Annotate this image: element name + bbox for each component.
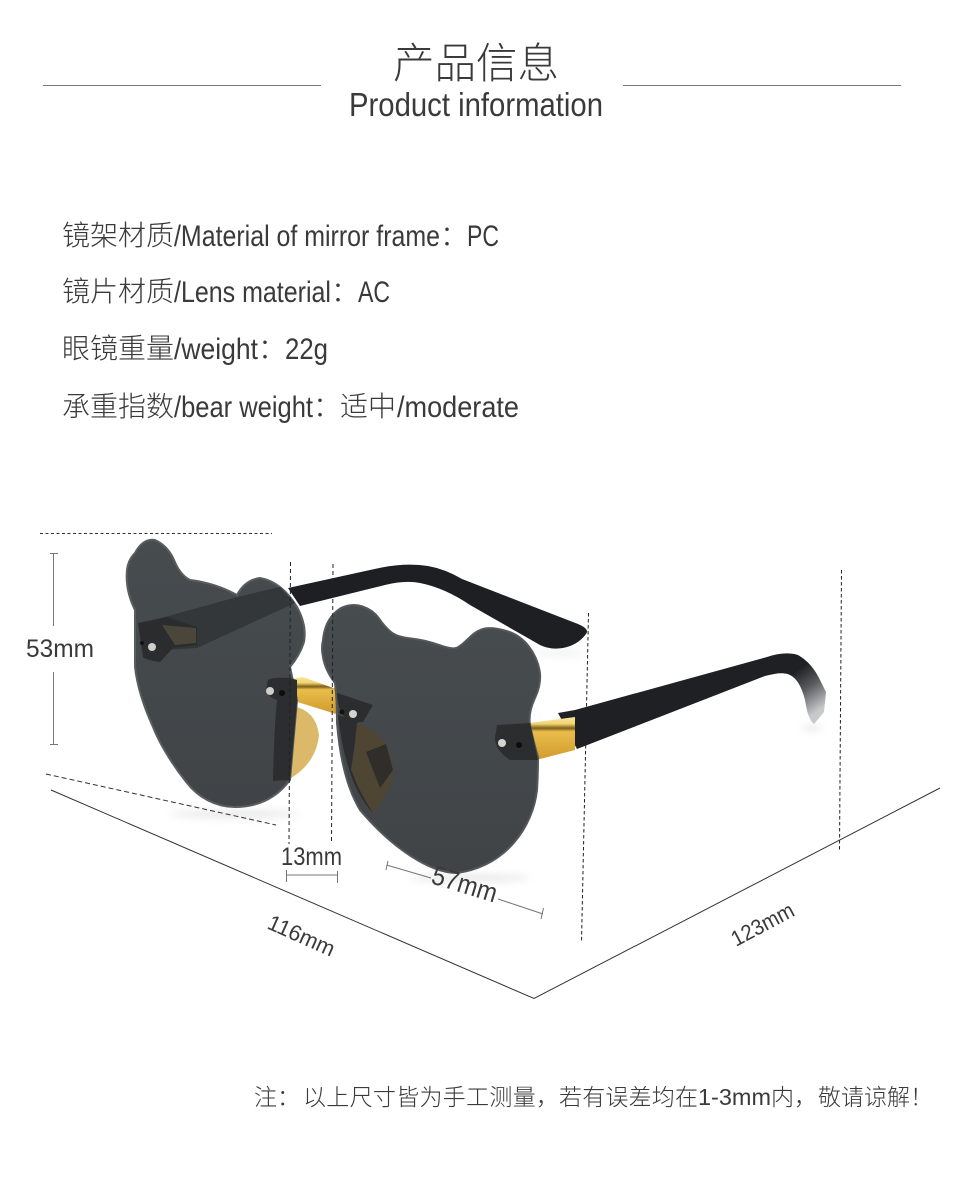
glasses shadows [170, 651, 823, 882]
footnote: 内， [771, 1084, 817, 1110]
spec: bearing weight: 适中 [340, 391, 396, 422]
spec: lens material: ： [331, 276, 359, 307]
spec: lens material: 镜片材质 [62, 276, 174, 307]
left outer hinge [138, 617, 197, 662]
spec: weight [62, 333, 328, 366]
spec: weight: 22g [285, 333, 328, 366]
back temple arm [288, 565, 587, 649]
dimension: total height 53mm: 53mm [26, 635, 94, 663]
spec: weight: /weight [174, 333, 259, 366]
left lens [127, 540, 305, 807]
spec: frame material: ： [440, 220, 468, 251]
footnote [254, 1084, 933, 1110]
title: Chinese heading: 产品信息 [393, 40, 559, 87]
floor axis lines [51, 788, 940, 998]
spec: bearing weight: ： [313, 391, 341, 422]
spec: frame material: 镜架材质 [62, 220, 174, 251]
left lens inner hinge [266, 678, 297, 781]
bridge: gold metal [290, 677, 336, 714]
front right gold hinge [530, 717, 575, 760]
dimension: bridge width 13mm [281, 562, 342, 883]
back temple seen through left lens [143, 587, 295, 650]
footnote: 敬请谅解！ [818, 1084, 933, 1110]
right lens inner band and reflection [338, 715, 373, 813]
footnote: 1-3mm [698, 1084, 771, 1110]
dimension: lens width 57mm: 57mm [428, 860, 501, 908]
right lens outer hinge [495, 723, 538, 760]
sunglasses illustration [127, 540, 826, 873]
dimension: lens width 57mm [386, 860, 544, 919]
specification list [62, 220, 519, 424]
dimension: bridge width 13mm: 13mm [281, 843, 342, 871]
dimension: temple guide lines [582, 570, 842, 942]
right lens [322, 605, 540, 873]
dimension: total height 53mm [26, 534, 276, 825]
spec: bearing weight [62, 391, 519, 424]
spec: weight: 眼镜重量 [62, 333, 174, 364]
footnote: 若有误差均在 [559, 1084, 698, 1110]
spec: bearing weight: 承重指数 [62, 391, 174, 422]
footnote: 注： [254, 1084, 300, 1110]
title block [349, 40, 603, 123]
dimension label: 116mm: 116mm [264, 910, 339, 961]
spec: lens material [62, 276, 390, 309]
bridge: gold half piece behind lens [286, 706, 319, 781]
spec: bearing weight: /moderate [397, 391, 519, 424]
front temple arm [558, 653, 826, 749]
right lens inner hinge [337, 693, 373, 723]
spec: weight: ： [258, 333, 286, 364]
dimension label: 123mm: 123mm [727, 897, 798, 951]
spec: lens material: AC [358, 276, 390, 309]
title: English heading: Product information [349, 86, 603, 123]
spec: frame material: /Material of mirror frame [174, 220, 440, 253]
spec: lens material: /Lens material [174, 276, 331, 309]
spec: bearing weight: /bear weight [174, 391, 314, 424]
spec: frame material: PC [467, 220, 499, 253]
footnote: 以上尺寸皆为手工测量， [303, 1084, 559, 1110]
